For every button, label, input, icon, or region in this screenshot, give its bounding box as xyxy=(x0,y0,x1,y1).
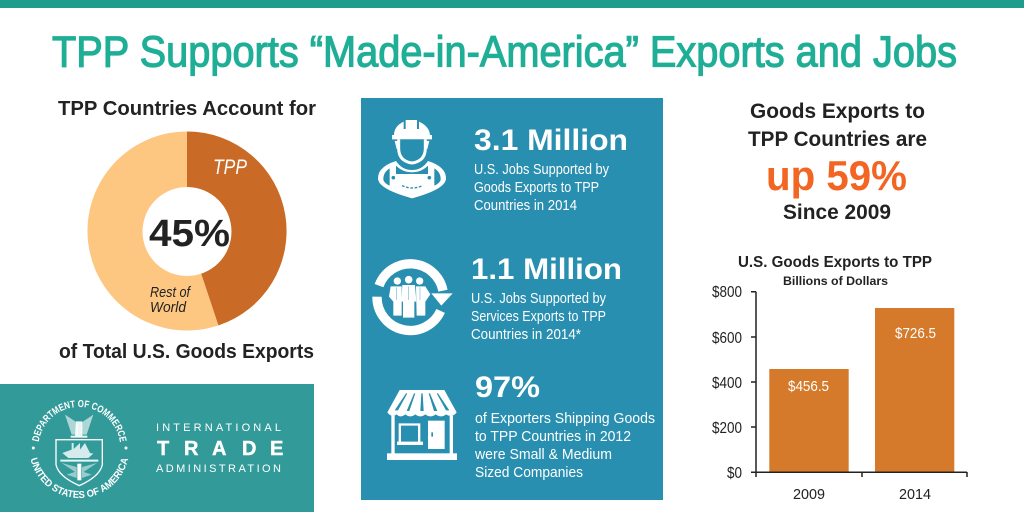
x axis labels: 2014 xyxy=(899,486,931,503)
donut label: rest of world: World xyxy=(150,299,187,316)
seal: UNITED STATES OF AMERICA xyxy=(31,458,128,498)
x axis labels: 2009 xyxy=(793,486,825,503)
seal: DEPARTMENT OF COMMERCE xyxy=(32,400,127,442)
top bar xyxy=(0,0,1024,8)
logo wordmark: TRADE xyxy=(157,438,283,460)
callout: exports up 59 percent: TPP Countries are xyxy=(748,128,927,151)
stat: 97 percent: were Small & Medium xyxy=(474,446,612,463)
callout: exports up 59 percent xyxy=(748,100,927,224)
stat: 97 percent: of Exporters Shipping Goods xyxy=(475,410,655,427)
stat: 1.1 million xyxy=(471,253,622,343)
bar values: $456.5 xyxy=(788,378,829,395)
stat: 1.1 million: 1.1 Million xyxy=(471,253,622,286)
donut label: rest of world: Rest of xyxy=(150,284,192,301)
icon: storefront xyxy=(387,390,457,460)
heading: donut bottom: of Total U.S. Goods Exports xyxy=(59,341,314,363)
stat: 1.1 million: U.S. Jobs Supported by xyxy=(471,290,606,307)
y axis labels: $600 xyxy=(712,330,742,347)
stat: 3.1 million: U.S. Jobs Supported by xyxy=(474,161,609,178)
callout: exports up 59 percent: up 59% xyxy=(766,152,907,199)
callout: exports up 59 percent: Goods Exports to xyxy=(750,100,925,123)
stat: 1.1 million: Services Exports to TPP xyxy=(471,308,606,325)
bar chart xyxy=(712,254,967,503)
bar values xyxy=(788,325,936,395)
stat: 1.1 million: Countries in 2014* xyxy=(471,326,581,343)
logo wordmark: INTERNATIONAL xyxy=(156,422,281,434)
stat: 3.1 million: Goods Exports to TPP xyxy=(474,179,599,196)
title: TPP Supports “Made-in-America” Exports and Jobs xyxy=(52,28,957,76)
stat: 97 percent: Sized Companies xyxy=(475,464,583,481)
y axis labels xyxy=(712,284,742,482)
logo panel xyxy=(0,384,314,512)
logo wordmark xyxy=(156,422,283,475)
y axis labels: $200 xyxy=(712,420,742,437)
stat: 97 percent xyxy=(474,371,655,481)
stat: 3.1 million: 3.1 Million xyxy=(474,124,628,157)
chart subtitle: Billions of Dollars xyxy=(783,274,888,288)
x axis labels xyxy=(793,486,931,503)
panel: jobs statistics xyxy=(361,98,663,500)
stat: 3.1 million xyxy=(474,124,628,214)
seal xyxy=(31,400,128,498)
bar values: $726.5 xyxy=(895,325,936,342)
heading: donut top: TPP Countries Account for xyxy=(58,98,316,120)
icon: circular arrows with workers xyxy=(377,264,453,331)
donut label: TPP: TPP xyxy=(213,156,247,179)
y axis labels: $800 xyxy=(712,284,742,301)
logo wordmark: ADMINISTRATION xyxy=(156,463,281,475)
callout: exports up 59 percent: Since 2009 xyxy=(783,201,891,224)
stat: 97 percent: 97% xyxy=(475,371,540,404)
bars xyxy=(769,369,849,472)
y axis labels: $0 xyxy=(727,465,742,482)
donut value: 45% xyxy=(149,213,230,255)
icon: construction worker xyxy=(378,120,446,198)
stat: 3.1 million: Countries in 2014 xyxy=(474,197,577,214)
stat: 97 percent: to TPP Countries in 2012 xyxy=(475,428,631,445)
chart title: U.S. Goods Exports to TPP xyxy=(738,254,932,271)
donut chart xyxy=(88,131,287,330)
axes xyxy=(751,292,967,477)
y axis labels: $400 xyxy=(712,375,742,392)
